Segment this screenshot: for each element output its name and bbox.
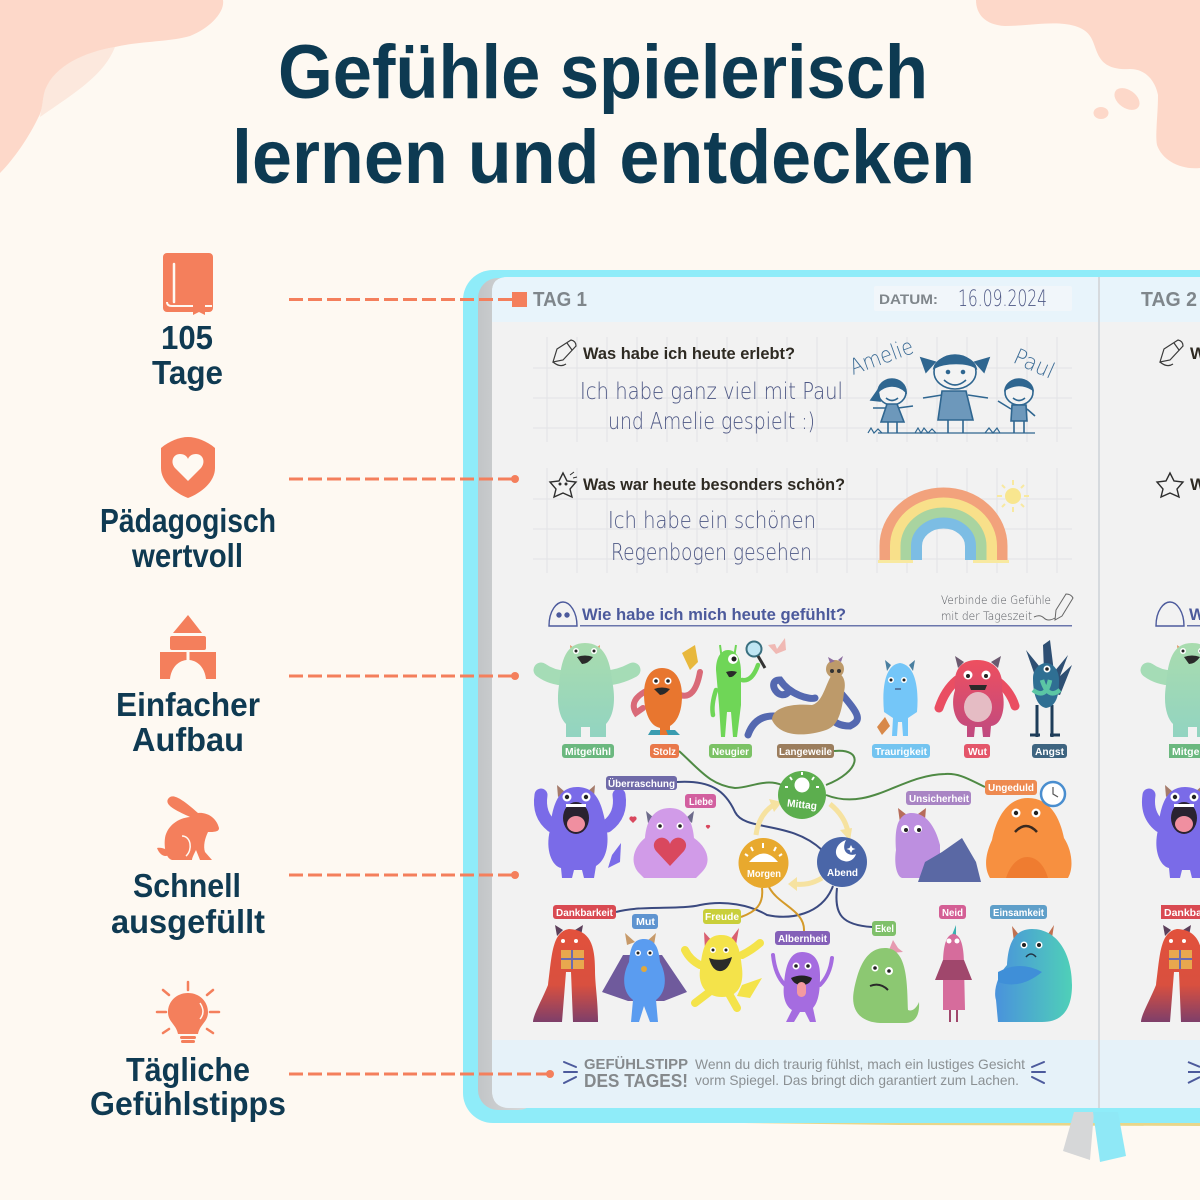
clock — [1041, 782, 1065, 806]
book cover — [463, 270, 1200, 1123]
icon: rabbit — [157, 796, 219, 860]
tip of the day — [564, 1056, 1045, 1091]
title — [232, 30, 975, 200]
small boy — [998, 379, 1035, 433]
emotion labels: Wut — [968, 746, 987, 758]
monster: Angst — [1026, 640, 1072, 737]
feature: Schnell ausgefüllt — [111, 796, 265, 940]
drawing: sun — [997, 480, 1029, 512]
heading underline — [580, 625, 1072, 626]
left tip marks — [564, 1062, 577, 1083]
name Amelie: Amelie — [847, 335, 917, 381]
monster: Stolz — [634, 645, 700, 735]
icon: light bulb — [157, 982, 219, 1043]
page 2 header: TAG 2: TAG 2 — [1141, 289, 1197, 311]
title: lernen und entdecken — [232, 115, 975, 200]
tip text: Wenn du dich traurig fühlst, mach ein lustiges Gesicht — [695, 1056, 1025, 1072]
time circle: Morgen — [738, 838, 788, 888]
header band left and right — [492, 277, 1200, 322]
emotion labels: Albernheit — [778, 933, 827, 945]
callout arrow: Pädagogisch wertvoll — [289, 475, 519, 483]
handwritten answer 2: Regenbogen gesehen — [611, 540, 812, 566]
icon: shield with heart — [161, 437, 215, 498]
question heading 1: Was habe ich heute erlebt? — [583, 344, 795, 363]
feature: 105 Tage — [152, 253, 223, 391]
monster: Mut — [602, 933, 687, 1022]
monster: Wut — [939, 656, 1015, 737]
feature text — [100, 502, 276, 574]
feature text: Tage — [152, 354, 223, 391]
question heading 2: Was war heute besonders schön? — [583, 475, 845, 494]
feature text — [116, 686, 260, 758]
monster: Freude — [685, 928, 762, 1008]
callout arrow: Schnell ausgefüllt — [289, 871, 519, 879]
magnifier — [746, 642, 765, 668]
icon: feelings blob — [549, 602, 577, 626]
feature text — [111, 867, 265, 940]
feature: Tägliche Gefühlstipps — [90, 982, 286, 1122]
emotion labels: Mut — [636, 916, 655, 928]
drawing: rainbow — [878, 493, 1009, 563]
handwritten answer 1: Ich habe ganz viel mit Paul — [580, 379, 843, 405]
right tip marks — [1032, 1062, 1045, 1083]
page 2: repeated content cropped at the edge — [1141, 340, 1200, 1083]
callout arrow: Einfacher Aufbau — [289, 672, 519, 680]
time circle: Mittag: Mittag — [786, 797, 818, 813]
feature text: Gefühlstipps — [90, 1085, 286, 1122]
emotion labels: Stolz — [653, 746, 676, 758]
handwritten answer 2 — [608, 508, 816, 566]
page 2 monsters — [1141, 643, 1200, 1022]
tip text: vorm Spiegel. Das bringt dich garantiert zum Lachen. — [695, 1072, 1019, 1088]
emotion labels: Angst — [1035, 746, 1064, 758]
callout arrow: Tägliche Gefühlstipps — [289, 1070, 554, 1078]
emotion labels: Liebe — [689, 796, 713, 808]
time circle: Morgen: Morgen — [747, 868, 781, 880]
open book — [463, 270, 1200, 1162]
icon: building blocks — [160, 615, 216, 679]
date field: DATUM: — [879, 291, 938, 307]
callout arrow: 105 Tage — [289, 292, 527, 307]
pages — [492, 277, 1200, 1108]
emotion labels: Neugier — [712, 746, 749, 758]
emotion labels: Langeweile — [779, 746, 832, 758]
feature text: Einfacher — [116, 686, 260, 723]
page 2 labels: Mitge — [1172, 746, 1200, 758]
handwritten answer 1 — [580, 379, 843, 435]
tip heading — [584, 1056, 688, 1091]
instruction text: mit der Tageszeit — [941, 609, 1032, 623]
monster: Unsicherheit — [895, 808, 981, 882]
monster: Mitgefühl — [541, 643, 633, 737]
grass — [868, 428, 1035, 433]
monster: Neugier — [712, 638, 786, 737]
feature text: Pädagogisch — [100, 502, 276, 539]
emotion labels: Traurigkeit — [875, 746, 927, 758]
emotion labels: Ungeduld — [988, 782, 1034, 794]
page 2 questions — [1156, 340, 1200, 626]
tip heading: DES TAGES! — [584, 1070, 688, 1091]
monster: Überraschung — [540, 785, 621, 878]
heart — [654, 838, 686, 866]
tip text — [695, 1056, 1025, 1088]
emotion labels: Neid — [942, 907, 963, 919]
small girl — [871, 379, 913, 433]
icon: star — [550, 472, 577, 497]
feelings heading: Wie habe ich mich heute gefühlt? — [582, 605, 846, 624]
time circle: Abend: Abend — [827, 867, 858, 879]
instruction text — [941, 593, 1051, 623]
feature text — [90, 1051, 286, 1122]
instruction text: Verbinde die Gefühle — [941, 593, 1051, 607]
emotion labels: Einsamkeit — [993, 907, 1044, 919]
footer band — [492, 1040, 1200, 1108]
handwritten answer 2: Ich habe ein schönen — [608, 508, 816, 534]
monster: Einsamkeit — [995, 925, 1072, 1022]
background blob: top left — [0, 0, 223, 173]
page gutter — [1098, 277, 1100, 1108]
icon: book — [163, 253, 213, 315]
feature: Einfacher Aufbau — [116, 615, 260, 758]
page 2 labels — [1161, 744, 1200, 919]
monster: Liebe — [629, 808, 710, 878]
background blob: top right — [976, 0, 1200, 168]
emotion labels: Freude — [705, 911, 739, 923]
feature text: Tägliche — [126, 1051, 250, 1088]
monster: Ungeduld — [986, 782, 1071, 878]
ribbon: grey bookmark — [1063, 1112, 1094, 1160]
emotion labels: Mitgefühl — [565, 746, 611, 758]
handwritten answer 1: und Amelie gespielt :) — [608, 409, 815, 435]
monster: Traurigkeit — [877, 660, 918, 736]
emotion labels: Unsicherheit — [909, 793, 969, 805]
feature text: 105 — [161, 319, 213, 356]
page stack — [478, 278, 538, 1110]
feature text: Schnell — [133, 867, 241, 904]
feature text: Aufbau — [132, 721, 244, 758]
tip heading: GEFÜHLSTIPP — [584, 1056, 688, 1073]
feature: Pädagogisch wertvoll — [100, 437, 276, 574]
date field — [874, 286, 1072, 312]
page 1 header: TAG 1: TAG 1 — [533, 289, 587, 311]
feature text — [152, 319, 223, 391]
rock — [918, 838, 981, 882]
back cover yellow edge — [665, 1122, 1200, 1126]
title: Gefühle spielerisch — [278, 30, 928, 115]
monster: Dankbarkeit — [533, 925, 598, 1022]
drawing: children — [847, 335, 1058, 433]
emotion labels: Ekel — [875, 923, 894, 935]
emotion labels — [553, 744, 1067, 945]
name Paul: Paul — [1010, 345, 1058, 385]
cycle arrows — [756, 799, 852, 891]
emotion labels: Dankbarkeit — [556, 907, 613, 919]
feature text: ausgefüllt — [111, 903, 265, 940]
connection lines — [616, 751, 985, 931]
ribbon: blue bookmark — [1093, 1112, 1126, 1162]
notebook grid — [533, 337, 1072, 573]
page 2 tip marks — [1188, 1062, 1200, 1083]
icon: small pencil — [1034, 594, 1073, 620]
girl in the middle — [921, 355, 989, 433]
emotion labels: Überraschung — [608, 777, 675, 790]
icon: pencil — [553, 340, 576, 366]
feature text: wertvoll — [131, 537, 243, 574]
date field: 16.09.2024 — [958, 287, 1047, 312]
time circle: Mittag — [778, 771, 826, 819]
monster: Albernheit — [773, 952, 832, 1022]
monster: Neid — [935, 925, 972, 1022]
time circle: Abend — [817, 837, 867, 887]
monster: Langeweile — [748, 656, 857, 735]
monster: Ekel — [853, 940, 919, 1023]
butterfly — [768, 638, 786, 654]
